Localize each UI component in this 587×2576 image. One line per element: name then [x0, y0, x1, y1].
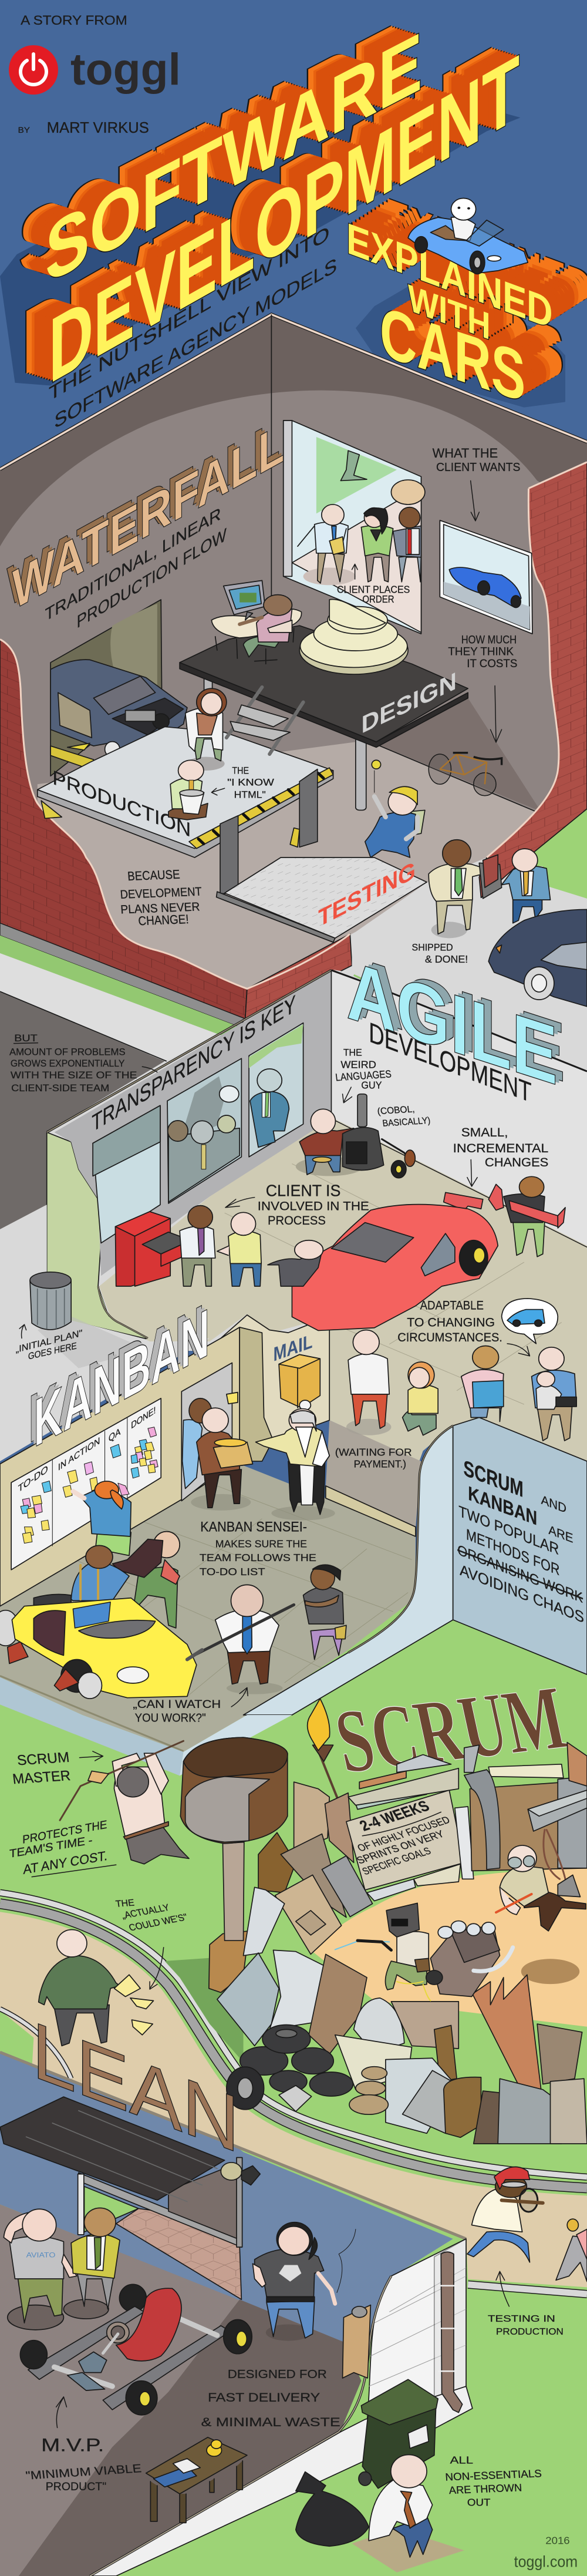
person: kneeling woman [403, 1362, 438, 1435]
text: can I watch you work [133, 1687, 248, 1725]
label: client places order [337, 584, 410, 605]
board column headers: IN ACTION [58, 1435, 100, 1473]
text: how much they think it costs: IT COSTS [467, 657, 517, 670]
text: small incremental changes: SMALL, [461, 1126, 508, 1139]
design platform [180, 625, 468, 810]
person: man in grey aviato t-shirt: AVIATO [26, 2251, 55, 2259]
text: weird languages guy: LANGUAGES [335, 1068, 392, 1084]
label: testing: TESTING [318, 856, 416, 933]
text: designed for fast delivery: DESIGNED FOR [228, 2368, 327, 2381]
panel: waterfall bottom and shipped [9, 840, 587, 1330]
white garage wall and base [90, 2239, 473, 2576]
subheading: traditional linear: PRODUCTION FLOW [77, 524, 227, 633]
text: weird languages guy: THE [343, 1047, 362, 1058]
poster: what the client wants [440, 520, 532, 634]
board column headers: DONE! [131, 1404, 156, 1431]
person: man in cat t-shirt with cigarette [252, 2222, 356, 2341]
text: initial plan goes here [16, 1324, 82, 1362]
sandbags [349, 2067, 388, 2114]
subtitle on the sky [49, 221, 337, 433]
person: sad thrown-out man [369, 2454, 433, 2557]
flaming torch [308, 1699, 337, 1797]
blue scrum wall [0, 1417, 587, 1775]
text: what the client wants: WHAT THE [433, 446, 498, 460]
ground strips: curb, grass, pavement, dark wall [0, 882, 587, 1286]
board column headers [18, 1404, 156, 1495]
text: because plans never change: PLANS NEVER [120, 900, 200, 917]
board column headers: QA [109, 1425, 121, 1444]
text: shipped and done: & DONE! [425, 954, 468, 965]
text: but amount of problems: AMOUNT OF PROBLEMS [9, 1047, 126, 1058]
title: cars: CARS [380, 291, 525, 418]
text: weird languages guy [335, 1047, 392, 1103]
panel: kanban area: KANBAN [28, 1289, 204, 1458]
person: pink shirt with blueprint [461, 1346, 504, 1421]
text: but amount of problems: WITH THE SIZE OF THE [11, 1070, 137, 1081]
person: client yellow shirt [217, 1212, 261, 1286]
title: software: SOFTWARE [45, 14, 423, 302]
label: mail sign: MAIL [274, 1330, 313, 1366]
label: production: PRODUCTION [52, 766, 191, 841]
heading: waterfall 3D: WATERFALL [6, 406, 280, 620]
text: kanban sensei [200, 1519, 316, 1578]
brick wall left [0, 639, 352, 1019]
person: manager with crowbar [187, 1585, 294, 1694]
person: man in yellow jacket [63, 2208, 120, 2319]
brick wall right [479, 462, 587, 897]
person: client dark with purple tie [180, 1206, 215, 1286]
text: designed for fast delivery: FAST DELIVERY [208, 2390, 320, 2405]
text: scrum master [9, 1747, 106, 1787]
title: explained: EXPLAINED [346, 213, 553, 338]
window: client meeting [284, 421, 425, 634]
garage paving [116, 2208, 241, 2299]
panel: waterfall building walls [0, 314, 587, 988]
text: actually could we's: „ACTUALLY [120, 1902, 171, 1921]
text: designed for fast delivery [201, 2368, 340, 2429]
text: kanban sensei: MAKES SURE THE [215, 1539, 307, 1550]
person: mechanic with ball [365, 760, 425, 857]
text: kanban sensei: TO-DO LIST [200, 1566, 265, 1578]
header: story from and author: MART VIRKUS [47, 119, 149, 136]
text: scrum and kanban on blue wall: ARE [548, 1522, 573, 1546]
text: but amount of problems: CLIENT-SIDE TEAM [11, 1083, 109, 1094]
board column headers: TO-DO [18, 1462, 48, 1495]
sign: transparency is key: TRANSPARENCY IS KEY [92, 990, 296, 1138]
green wheelie bin [359, 2379, 438, 2488]
text: actually could we's [115, 1898, 189, 1989]
pavement around kanban [0, 1205, 210, 1461]
text: actually could we's: COULD WE'S" [127, 1912, 189, 1933]
panel: waterfall [6, 406, 532, 893]
person: mechanic at red car [268, 1240, 323, 1286]
sign text: SPECIFIC GOALS [360, 1845, 433, 1877]
tyre stack [227, 2025, 353, 2111]
engine [397, 1921, 513, 2001]
kitchen counter with pot [343, 2305, 370, 2378]
text: scrum and kanban on blue wall: SCRUM [464, 1455, 524, 1502]
person: man in blue suit [502, 849, 551, 923]
text: because plans never change: DEVELOPMENT [120, 885, 202, 902]
text: scrum and kanban on blue wall [457, 1455, 584, 1626]
panel: lean garage wall, floor and door [0, 2052, 466, 2576]
panel: kanban area [0, 1272, 584, 1725]
text: small incremental changes [453, 1126, 548, 1186]
text: cobol basically [377, 1103, 431, 1129]
person: scrum master with spear [60, 1741, 189, 1864]
text: because plans never change: CHANGE! [138, 913, 189, 928]
text: the I know HTML: "I KNOW [227, 777, 274, 788]
text: adaptable [397, 1299, 529, 1356]
panel: lean garage scene [4, 2163, 587, 2572]
sign text: 2-4 WEEKS [357, 1798, 433, 1834]
text: designed for fast delivery: & MINIMAL WASTE [201, 2416, 340, 2429]
door roller [221, 2163, 260, 2185]
text: adaptable: CIRCUMSTANCES. [397, 1331, 502, 1344]
text: but amount of problems [9, 1033, 157, 1094]
window right with client in suit [249, 1023, 303, 1157]
person: client in door [183, 1393, 238, 1489]
production platform [38, 727, 333, 893]
text: what the client wants: CLIENT WANTS [436, 461, 520, 474]
subheading: traditional linear [45, 503, 227, 633]
red sports car [292, 1192, 498, 1330]
sticky notes [21, 1427, 158, 1543]
text: scrum and kanban on blue wall: AND [541, 1492, 566, 1516]
sign text [355, 1798, 452, 1877]
person: two workers with seat [71, 1532, 180, 1628]
text: the I know HTML [211, 765, 274, 801]
window left [93, 1105, 160, 1243]
garage door frame [78, 2157, 242, 2247]
panel: lean road and scrum yard ground [0, 1868, 587, 2294]
title: development: DEVELOPMENT [49, 35, 519, 403]
lawn wedge behind waterfall [517, 809, 587, 899]
text: waiting for payment: (WAITING FOR [335, 1447, 412, 1458]
text: because plans never change: BECAUSE [127, 867, 180, 883]
text: can I watch you work: YOU WORK?" [135, 1711, 206, 1725]
heading: waterfall 3D [6, 406, 285, 623]
text: weird languages guy: GUY [361, 1080, 382, 1091]
text: mvp: M.V.P. [41, 2435, 104, 2456]
label: client places order: CLIENT PLACES [337, 584, 410, 596]
text: small incremental changes: INCREMENTAL [453, 1142, 548, 1155]
person: kanban sensei [256, 1400, 335, 1521]
agile wall [99, 970, 587, 1461]
sign text: SPRINTS ON VERY [355, 1828, 446, 1867]
label: client places order: ORDER [362, 594, 394, 605]
person: man in grey suit [393, 507, 421, 582]
text: protects the team's time [9, 1818, 116, 1877]
text: non-essentials: NON-ESSENTIALS [445, 2467, 542, 2483]
text: client is involved: CLIENT IS [266, 1182, 340, 1200]
brick gate post [479, 855, 502, 899]
person: white shirt thinking [346, 1330, 391, 1435]
icon: broken bicycle [429, 753, 502, 796]
person: man in beige suit [429, 840, 494, 938]
toggl logo [9, 45, 181, 95]
label: design: DESIGN [361, 667, 457, 739]
person: the I know HTML guy [168, 760, 208, 820]
text: adaptable: ADAPTABLE [420, 1299, 484, 1313]
stepladder [227, 687, 303, 754]
text: adaptable: TO CHANGING [407, 1316, 495, 1329]
panel: scrum yard [9, 1667, 587, 2170]
scrap pile: boards and sheets [217, 1782, 587, 2144]
text: non-essentials: ALL [450, 2454, 473, 2466]
text: initial plan goes here: GOES HERE [28, 1341, 77, 1362]
person: woman with clipboard [185, 688, 227, 771]
drainpipe [438, 2252, 463, 2413]
overlay: title car [407, 197, 528, 275]
desk with computer and designer [211, 580, 302, 664]
steel beam [528, 1790, 587, 1831]
text: non-essentials: OUT [467, 2496, 490, 2508]
person: carrying spoiler [488, 1176, 565, 1257]
person: courier with box [191, 1408, 252, 1511]
text: mvp [25, 2397, 142, 2493]
person: man with chain and wrench [496, 1830, 586, 1931]
person: kanban orange hair at board [73, 1481, 131, 1556]
panel: kanban room floor and walls [0, 1315, 421, 1752]
panel: kanban area: KANBAN [33, 1293, 210, 1462]
person: man in grey aviato t-shirt [4, 2209, 77, 2330]
kanban whiteboard [11, 1398, 161, 1570]
text: because plans never change [118, 867, 204, 929]
text: protects the team's time: PROTECTS THE [22, 1818, 107, 1847]
person: man with folder [298, 505, 348, 583]
garage opening with grass [84, 2187, 139, 2232]
person: woman with toolbelt [303, 1565, 346, 1659]
bag of trash [296, 2472, 369, 2546]
mailbox [279, 1354, 320, 1408]
blue convertible with driver [408, 199, 528, 274]
text: how much they think it costs: THEY THINK [448, 645, 514, 658]
title: with: WITH [408, 276, 491, 348]
subtitle on the sky: THE NUTSHELL VIEW INTO [49, 221, 329, 406]
testing ramp [217, 857, 427, 942]
text: non-essentials [445, 2454, 542, 2508]
yellow car on jacks [0, 1595, 197, 1699]
person: testing in production rider [467, 2167, 543, 2262]
text: mvp: "MINIMUM VIABLE [25, 2461, 142, 2482]
text: testing in production: TESTING IN [488, 2313, 555, 2324]
window middle with watching clients [167, 1058, 241, 1203]
text: testing in production: PRODUCTION [496, 2326, 564, 2337]
text: but amount of problems: BUT [14, 1033, 38, 1044]
text: non-essentials: ARE THROWN [448, 2481, 522, 2496]
text: mvp: PRODUCT" [46, 2480, 106, 2493]
cardboard sheet [352, 2528, 464, 2572]
header: story from and author: A STORY FROM [21, 13, 127, 28]
text: waiting for payment [335, 1447, 412, 1470]
subtitle on the sky: SOFTWARE AGENCY MODELS [54, 254, 337, 433]
title shadows on the sky [0, 90, 565, 408]
person: man with baby carrier [532, 1347, 576, 1441]
heading: waterfall 3D: WATERFALL [12, 409, 285, 623]
text: scrum and kanban on blue wall: KANBAN [468, 1482, 537, 1529]
text: shipped and done [412, 942, 468, 965]
red filing cabinet [115, 1212, 191, 1286]
text: waiting for payment: PAYMENT.) [354, 1459, 406, 1470]
person: bald man at lean road [39, 1929, 153, 2046]
text: scrum master: SCRUM [16, 1750, 70, 1768]
person: weird languages guy and stove car [296, 1094, 415, 1178]
text: initial plan goes here: „INITIAL PLAN" [16, 1328, 82, 1355]
toggl logo: toggl [70, 45, 181, 95]
text: cobol basically: BASICALLY) [382, 1115, 431, 1129]
spiral stairs [299, 600, 408, 674]
footer: year and site: 2016 [545, 2535, 570, 2547]
rubber duck table [146, 2437, 247, 2523]
speech bubble with van [502, 1299, 558, 1344]
footer: year and site [514, 2535, 578, 2570]
text: cobol basically: (COBOL, [377, 1104, 415, 1117]
text: what the client wants [433, 446, 520, 521]
text: protects the team's time: TEAM'S TIME - [9, 1834, 93, 1861]
text: scrum master: MASTER [12, 1768, 72, 1787]
person: welder [335, 1903, 430, 1990]
sign: sprint duration [346, 1755, 474, 1901]
text: shipped and done: SHIPPED [412, 942, 453, 953]
panel: transparency wall with windows [47, 970, 331, 1339]
text: testing in production [488, 2271, 564, 2337]
text: the I know HTML: THE [232, 765, 249, 776]
text: weird languages guy: WEIRD [340, 1059, 376, 1071]
warning barrier [556, 2219, 587, 2282]
text: kanban sensei: TEAM FOLLOWS THE [200, 1552, 316, 1563]
icon: trash can [30, 1272, 71, 1330]
heading: waterfall 3D: WATERFALL [9, 408, 283, 621]
header: story from and author [18, 13, 149, 136]
text: kanban sensei: KANBAN SENSEI- [200, 1519, 307, 1535]
panel: kanban area: KANBAN [31, 1292, 207, 1460]
sign text: OF HIGHLY FOCUSED [356, 1815, 452, 1854]
text: how much they think it costs: HOW MUCH [461, 633, 517, 646]
garage roof panel [0, 2097, 225, 2202]
text: client is involved [225, 1182, 369, 1228]
text: actually could we's: THE [115, 1898, 135, 1909]
text: how much they think it costs [448, 633, 517, 742]
heading: kanban 3D [28, 1289, 210, 1462]
water tower [180, 1737, 288, 1993]
header: story from and author: BY [18, 125, 30, 134]
garage door and production car [50, 600, 187, 776]
text: small incremental changes: CHANGES [485, 1156, 548, 1169]
text: protects the team's time: AT ANY COST. [23, 1848, 107, 1877]
subheading: traditional linear: TRADITIONAL, LINEAR [45, 503, 221, 625]
shipped car [488, 909, 587, 1007]
text: client is involved: PROCESS [268, 1214, 326, 1228]
heading: lean wooden letters: LEAN [32, 2004, 239, 2170]
text: the I know HTML: HTML" [234, 789, 266, 801]
text: client is involved: INVOLVED IN THE [258, 1199, 369, 1213]
text: but amount of problems: GROWS EXPONENTIALLY [11, 1058, 124, 1069]
person: woman in green [361, 508, 393, 582]
go-kart MVP [20, 2284, 252, 2415]
text: can I watch you work: „CAN I WATCH [133, 1697, 221, 1710]
fence and wrench [464, 1743, 587, 1871]
